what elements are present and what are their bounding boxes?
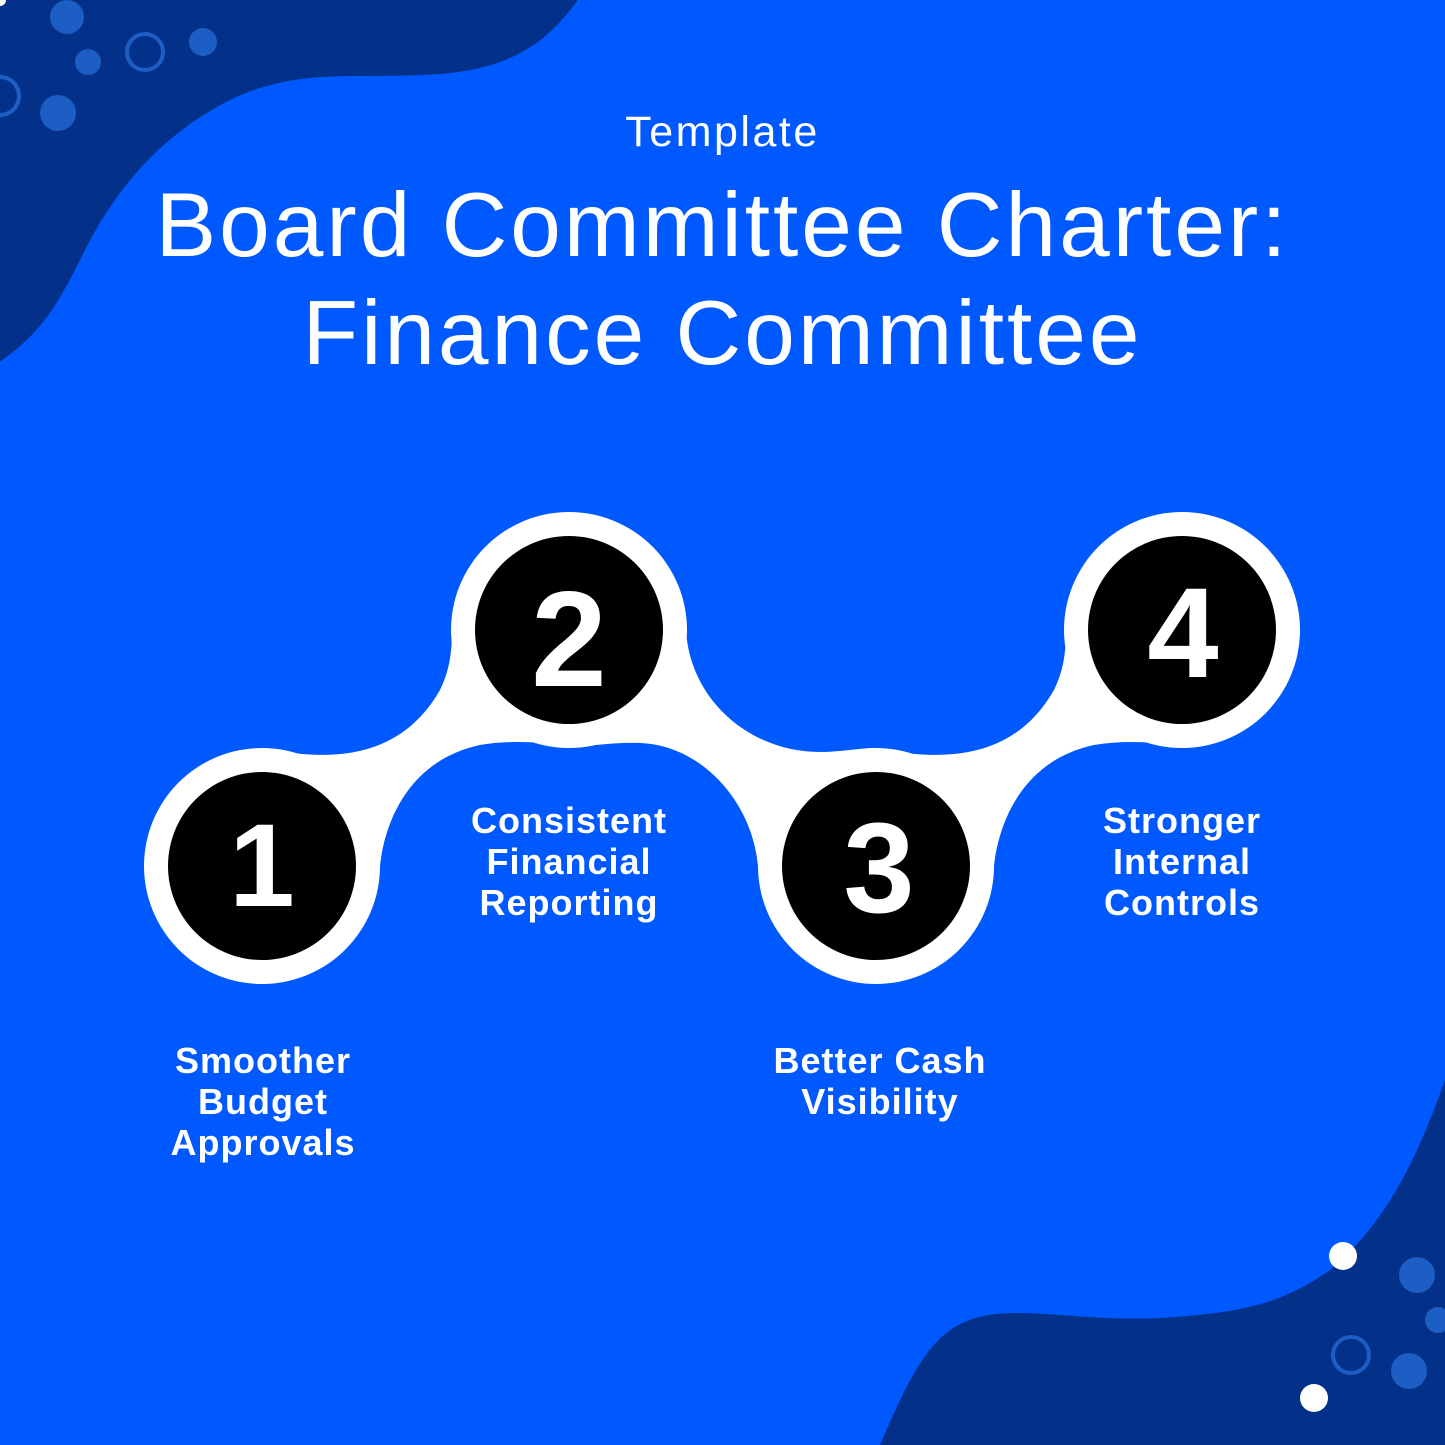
label 1: Budget (198, 1081, 328, 1122)
step 3 badge: 3 (843, 797, 915, 940)
label 2: Reporting (480, 882, 658, 923)
label 2 (471, 800, 667, 923)
step 2 badge (475, 536, 663, 724)
title: Board Committee Charter: (155, 175, 1290, 276)
step 3 badge (782, 772, 970, 960)
label 2: Consistent (471, 800, 667, 841)
label 1 (170, 1040, 356, 1163)
step 2 badge: 2 (531, 563, 607, 715)
blob: bottom-right dark (880, 1080, 1445, 1445)
step 1 badge: 1 (229, 800, 295, 932)
label 4: Controls (1104, 882, 1260, 923)
label 1: Smoother (175, 1040, 351, 1081)
label 1: Approvals (170, 1122, 356, 1163)
step 4 badge (1088, 536, 1276, 724)
label 4 (1103, 800, 1261, 923)
chain: white connectors (144, 512, 1300, 984)
label 3: Better Cash (773, 1040, 987, 1081)
label 2: Financial (486, 841, 652, 882)
step 1 badge (168, 772, 356, 960)
label 3 (773, 1040, 987, 1122)
subtitle: Template: Template (625, 108, 820, 156)
title (155, 175, 1290, 384)
step 4 badge: 4 (1147, 562, 1219, 705)
label 4: Internal (1113, 841, 1251, 882)
title: Finance Committee (303, 283, 1142, 384)
label 3: Visibility (801, 1081, 959, 1122)
blob: top-left dark (0, 0, 578, 362)
label 4: Stronger (1103, 800, 1261, 841)
